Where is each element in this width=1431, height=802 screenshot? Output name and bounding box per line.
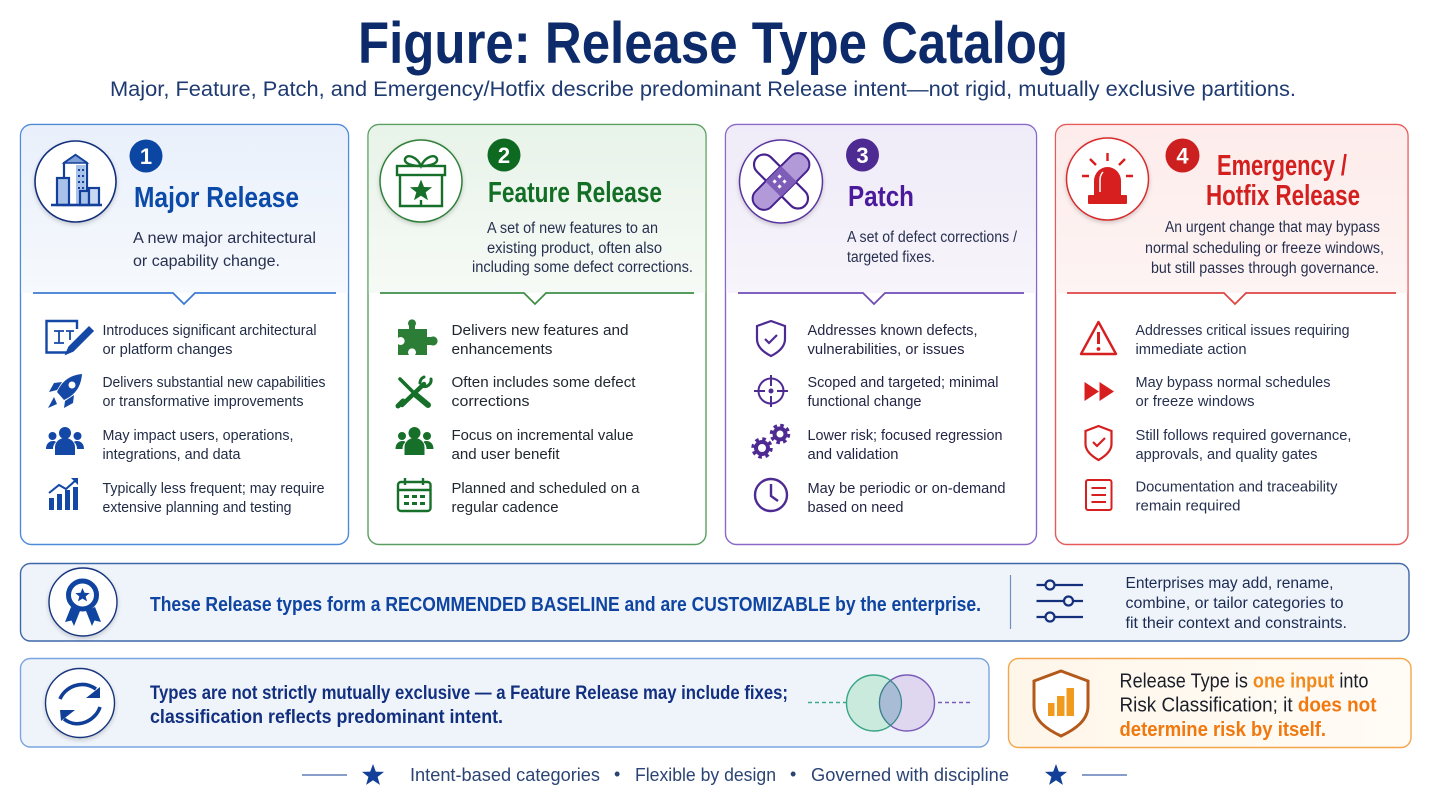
footer tagline	[302, 764, 1127, 785]
bullet: or transformative improvements	[102, 393, 304, 410]
icon: sliders	[1036, 580, 1083, 622]
description: A set of new features to an	[487, 220, 658, 237]
callout text	[150, 682, 788, 728]
badge 4	[1166, 138, 1200, 172]
bullet: May impact users, operations,	[102, 427, 294, 444]
badge 1: 1	[140, 144, 152, 169]
icon: refresh arrows	[46, 668, 114, 738]
bullet	[452, 374, 636, 410]
bullet	[102, 374, 326, 410]
bullet: Planned and scheduled on a	[452, 480, 640, 497]
heading: major release: Major Release	[134, 182, 299, 214]
icon: clock	[755, 479, 787, 511]
badge 4: 4	[1176, 144, 1189, 168]
description: normal scheduling or freeze windows,	[1145, 240, 1384, 257]
bullet	[1136, 322, 1350, 358]
callout text	[1120, 670, 1377, 741]
description	[1145, 219, 1384, 277]
panel: risk note	[1008, 658, 1411, 748]
bullet	[452, 480, 640, 516]
badge 2: 2	[498, 143, 510, 168]
description: A set of defect corrections /	[847, 229, 1018, 246]
icon: gears	[753, 426, 788, 457]
bullet: regular cadence	[452, 499, 558, 516]
bullet	[808, 480, 1006, 516]
title: Figure: Release Type Catalog	[358, 11, 1068, 76]
bullet: and validation	[808, 446, 898, 463]
callout text: Types are not strictly mutually exclusive — a Feature Release may include fixes;	[150, 682, 788, 704]
bullet: vulnerabilities, or issues	[808, 341, 964, 358]
bullet	[452, 427, 634, 463]
bullet: Scoped and targeted; minimal	[808, 374, 998, 391]
description	[472, 220, 693, 276]
bullet: functional change	[808, 393, 922, 410]
description: or capability change.	[133, 253, 280, 270]
description	[847, 229, 1018, 266]
bullet: Introduces significant architectural	[102, 322, 316, 339]
heading: emergency hotfix release	[1206, 150, 1360, 212]
bullet	[808, 322, 978, 358]
icon: award ribbon	[49, 568, 117, 636]
footer tagline: Governed with discipline	[811, 765, 1009, 785]
bullet: or freeze windows	[1136, 393, 1254, 410]
bullet: Delivers substantial new capabilities	[102, 374, 326, 391]
footer tagline: •	[614, 764, 620, 784]
icon: calendar	[398, 478, 430, 511]
heading: feature release: Feature Release	[488, 177, 662, 209]
icon: bandage	[740, 140, 822, 223]
icon: gift box	[380, 140, 462, 222]
heading: emergency hotfix release: Emergency /	[1217, 150, 1347, 182]
subtitle: Major, Feature, Patch, and Emergency/Hotfix describe predominant Release intent—not rigid, mutually exclusive partitions.	[110, 77, 1296, 101]
icon: shield with bars	[1034, 671, 1088, 736]
icon: warning triangle	[1081, 322, 1116, 354]
badge 3	[846, 138, 879, 172]
side note: fit their context and constraints.	[1126, 615, 1347, 632]
bullet: Addresses known defects,	[808, 322, 978, 339]
description: existing product, often also	[487, 240, 662, 257]
description: but still passes through governance.	[1151, 260, 1379, 277]
bullet: Still follows required governance,	[1136, 427, 1352, 444]
description	[133, 230, 316, 270]
icon: rocket	[48, 374, 82, 408]
icon: growth chart	[49, 478, 78, 510]
bullet: extensive planning and testing	[102, 499, 292, 516]
bullet	[102, 480, 324, 516]
panel: emergency hotfix	[1056, 124, 1408, 544]
bullet: remain required	[1136, 498, 1240, 514]
bullet: corrections	[452, 393, 530, 410]
bullet: May be periodic or on-demand	[808, 480, 1006, 497]
description: targeted fixes.	[847, 249, 935, 266]
callout text: Risk Classification; it does not	[1120, 694, 1377, 716]
bullet: Delivers new features and	[452, 322, 628, 339]
badge 2	[488, 138, 520, 172]
bullet	[1136, 478, 1338, 514]
icon: buildings	[35, 141, 116, 222]
icon: siren	[1066, 138, 1148, 220]
heading: emergency hotfix release: Hotfix Release	[1206, 180, 1360, 212]
description: including some defect corrections.	[472, 259, 693, 276]
panel: not mutually exclusive	[20, 658, 989, 747]
icon: crosshair	[754, 375, 788, 407]
bullet: Lower risk; focused regression	[808, 427, 1002, 444]
footer tagline: Flexible by design	[635, 765, 776, 785]
bullet	[102, 427, 294, 463]
side note: combine, or tailor categories to	[1126, 595, 1344, 612]
side note	[1126, 575, 1347, 632]
side note: Enterprises may add, rename,	[1126, 575, 1334, 592]
badge 1	[130, 140, 162, 172]
bullet: immediate action	[1136, 341, 1246, 358]
bullet: Focus on incremental value	[452, 427, 634, 444]
callout text: These Release types form a RECOMMENDED BASELINE and are CUSTOMIZABLE by the enterprise.	[150, 594, 981, 616]
icon: shield check	[757, 321, 785, 356]
description: A new major architectural	[133, 230, 316, 247]
bullet	[102, 322, 316, 358]
bullet: May bypass normal schedules	[1136, 374, 1330, 391]
bullet: and user benefit	[452, 446, 560, 463]
panel: patch	[726, 124, 1036, 544]
icon: shield check	[1086, 426, 1112, 460]
bullet	[1136, 374, 1330, 410]
bullet: or platform changes	[102, 341, 232, 358]
bullet	[1136, 427, 1352, 463]
footer tagline: •	[790, 764, 796, 784]
icon: people	[396, 427, 434, 455]
bullet: Documentation and traceability	[1136, 478, 1338, 496]
footer tagline: Intent-based categories	[410, 765, 600, 785]
callout text: Release Type is one input into	[1120, 670, 1368, 692]
badge 3: 3	[856, 143, 869, 168]
icon: fast forward	[1084, 382, 1114, 401]
panel: major release	[20, 124, 348, 544]
callout text: classification reflects predominant intent.	[150, 706, 503, 728]
bullet: Typically less frequent; may require	[102, 480, 324, 497]
callout text: determine risk by itself.	[1120, 719, 1326, 741]
bullet: integrations, and data	[102, 446, 241, 463]
panel: baseline band	[20, 564, 1409, 641]
bullet: enhancements	[452, 341, 552, 358]
bullet	[808, 427, 1002, 463]
bullet	[452, 322, 628, 358]
icon: puzzle piece	[398, 319, 438, 355]
panel: feature release	[368, 124, 706, 544]
heading: patch: Patch	[848, 181, 914, 213]
venn diagram	[808, 675, 973, 731]
bullet: approvals, and quality gates	[1136, 446, 1318, 463]
icon: people	[46, 427, 84, 455]
icon: document	[1086, 480, 1112, 510]
icon: blueprint pencil	[46, 321, 93, 354]
bullet: Often includes some defect	[452, 374, 636, 391]
bullet	[808, 374, 998, 410]
bullet: Addresses critical issues requiring	[1136, 322, 1350, 339]
icon: tools	[398, 377, 431, 406]
bullet: based on need	[808, 499, 904, 516]
description: An urgent change that may bypass	[1165, 219, 1380, 236]
